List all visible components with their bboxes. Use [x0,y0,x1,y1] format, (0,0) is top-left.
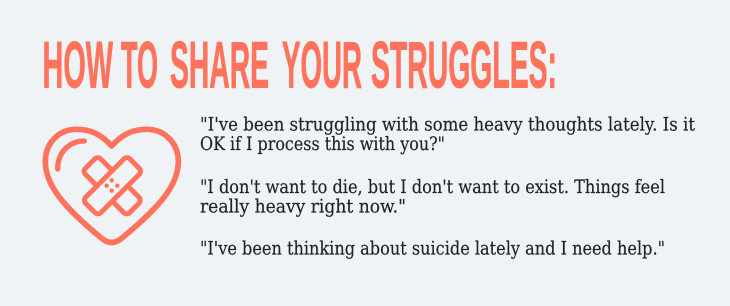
icon: heart with bandage [45,129,178,242]
title: TO [121,28,158,101]
bandage back strip [82,156,142,216]
bandage front strip [83,156,142,216]
heart highlight [58,141,84,169]
quote 2: really heavy right now." [200,196,406,218]
title: HOW [42,28,113,101]
quote 1 [200,114,695,155]
title: YOUR [282,28,362,101]
title: SHARE [170,28,269,101]
text block: examples [200,114,695,260]
quote 1: OK if I process this with you?" [200,133,445,155]
bandage dots [104,178,119,193]
title [42,28,557,101]
quote 2 [200,176,665,218]
heart outline [45,129,178,242]
